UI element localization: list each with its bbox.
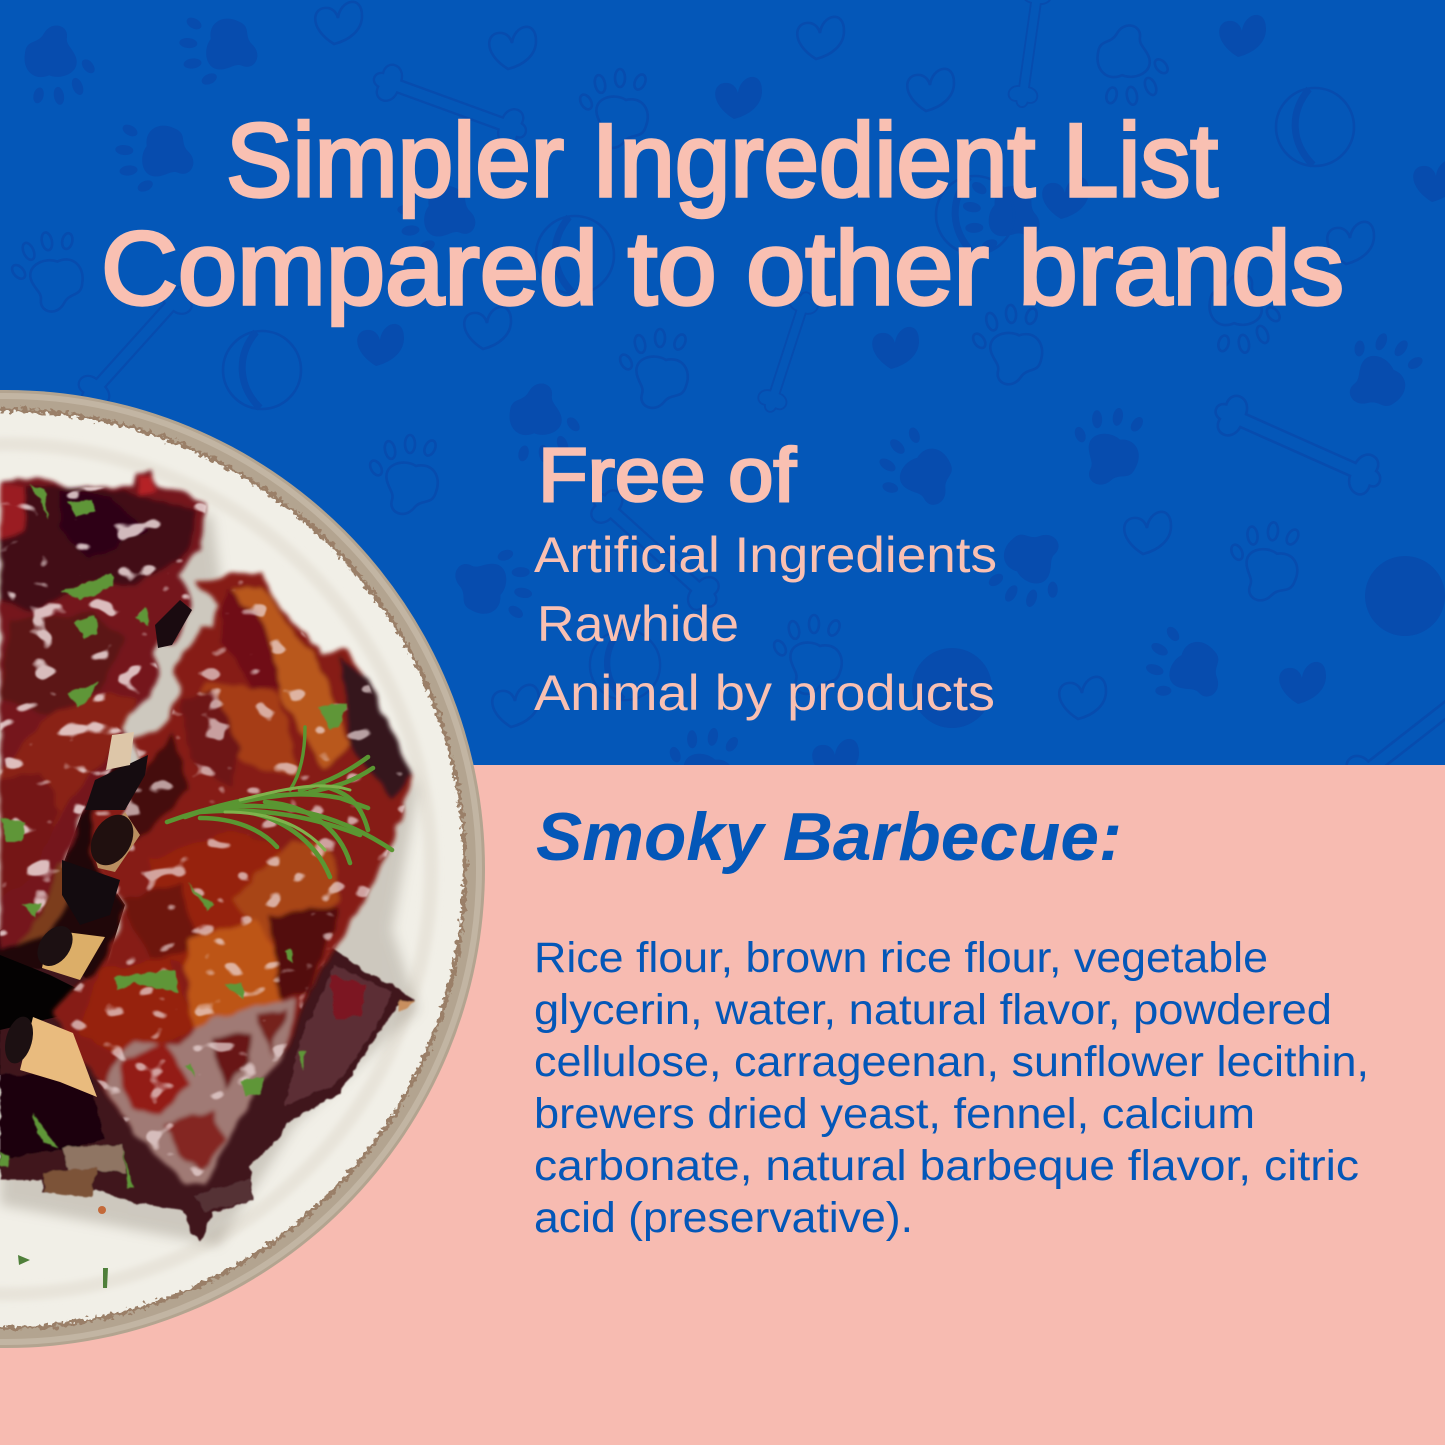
sauce drip on plate bbox=[98, 1206, 106, 1214]
plate with ribs photo illustration bbox=[0, 390, 485, 1348]
ragged glaze edge bbox=[0, 408, 467, 1330]
bone end middle bbox=[92, 812, 140, 872]
heading: Simpler Ingredient List: Simpler Ingredient List bbox=[226, 103, 1218, 219]
bone tip lower bbox=[20, 1017, 97, 1097]
heading: Simpler Ingredient List: Compared to other brands bbox=[101, 211, 1344, 327]
pet icon pattern bbox=[4, 0, 1445, 811]
free-of list: Rawhide bbox=[537, 596, 739, 652]
ingredient paragraph: cellulose, carrageenan, sunflower lecithin, bbox=[534, 1038, 1369, 1086]
ingredient paragraph bbox=[534, 934, 1369, 1242]
ingredient paragraph: carbonate, natural barbeque flavor, citric bbox=[534, 1142, 1359, 1190]
dark underlay between ribs bbox=[0, 766, 125, 1075]
plate herb crumbs bbox=[18, 1255, 108, 1288]
rib gloss bbox=[55, 573, 413, 1183]
dark gap under bones bbox=[0, 955, 80, 1030]
heading: Simpler Ingredient List bbox=[101, 103, 1344, 327]
plate surface bbox=[0, 412, 463, 1326]
plate rim bbox=[0, 390, 485, 1348]
ingredient paragraph: brewers dried yeast, fennel, calcium bbox=[534, 1090, 1255, 1138]
free-of list bbox=[534, 527, 997, 721]
bone tip upper bbox=[42, 930, 105, 980]
parsley flecks bbox=[0, 484, 348, 1188]
shadow under food bbox=[0, 495, 418, 1245]
center rib bbox=[55, 573, 413, 1183]
ingredient paragraph: acid (preservative). bbox=[534, 1194, 913, 1242]
free-of heading: Free of bbox=[538, 433, 797, 518]
ingredient paragraph: Rice flour, brown rice flour, vegetable bbox=[534, 934, 1268, 982]
background: blue upper panel bbox=[0, 0, 1445, 765]
rib bones bbox=[0, 600, 192, 1097]
flavor heading: Smoky Barbecue: bbox=[536, 799, 1122, 875]
background: pink lower panel bbox=[0, 765, 1445, 1445]
free-of list: Artificial Ingredients bbox=[534, 527, 997, 583]
ingredient paragraph: glycerin, water, natural flavor, powdered bbox=[534, 986, 1332, 1034]
rack of ribs, top left bbox=[0, 470, 207, 950]
rack gloss bbox=[0, 470, 207, 950]
free-of list: Animal by products bbox=[534, 665, 995, 721]
rosemary sprig bbox=[167, 727, 392, 877]
bottom dark rib bbox=[0, 947, 415, 1242]
